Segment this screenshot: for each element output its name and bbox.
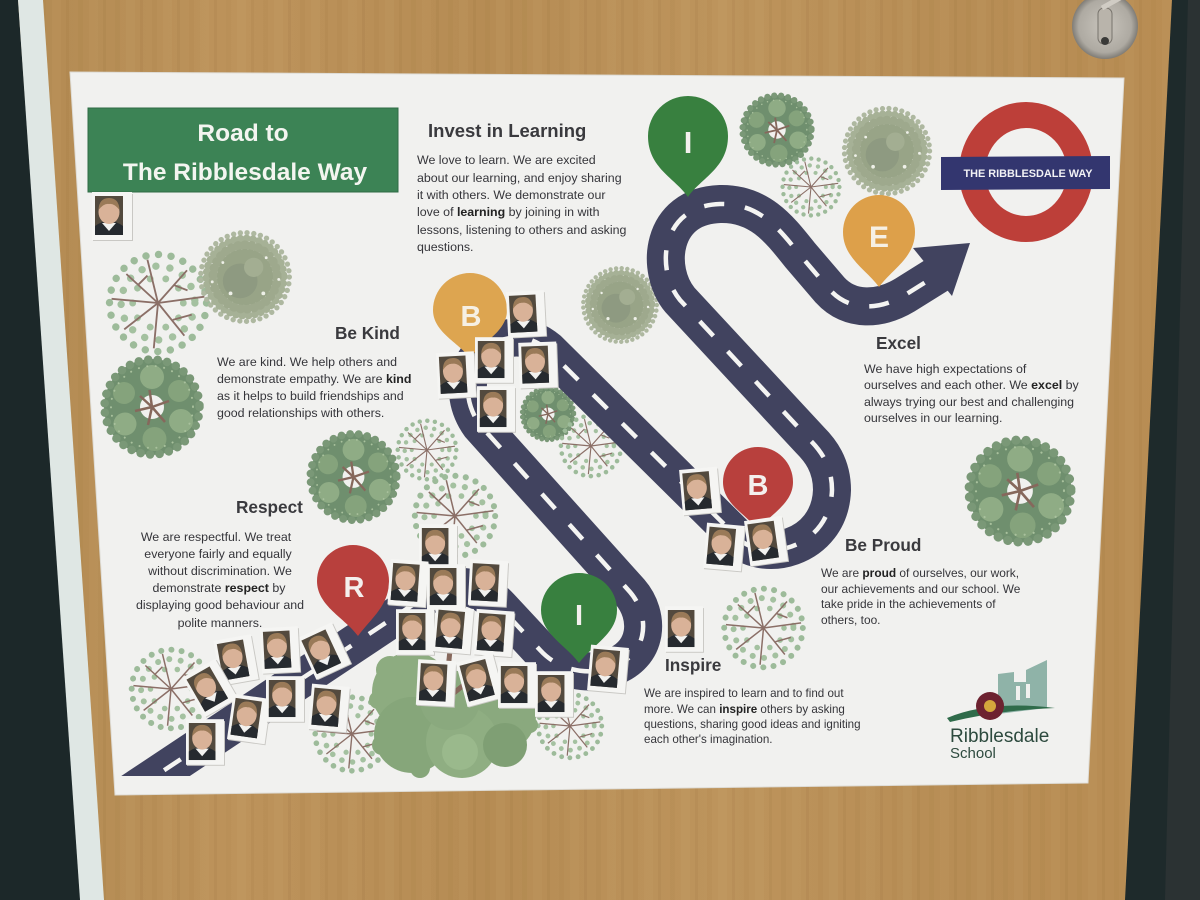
text: Excel: ourselves in our learning. [864,411,1002,425]
pin: I upper: I [684,125,692,160]
pin: I lower: I [575,600,583,632]
text: Excel: always trying our best and challenging [864,395,1074,409]
text: Inspire: questions, sharing good ideas and igniting [644,718,861,731]
logo: Ribblesdale School [947,660,1055,762]
left door frame [0,0,104,900]
text: Respect: demonstrate respect by [153,581,286,595]
pin: B orange: B [461,301,481,333]
text: Respect: everyone fairly and equally [144,547,293,561]
pin: B red [723,447,793,530]
title banner [88,108,398,192]
text: Be Kind: We are kind. We help others and [217,355,397,369]
text: Be Proud [821,566,1021,627]
poster sheet [70,72,1124,795]
text: Be Proud: others, too. [821,613,880,627]
pin: I upper [648,96,728,197]
heading: Invest in Learning: Invest in Learning [428,120,586,141]
title banner: Road to [197,120,289,147]
pin: I lower [541,573,617,663]
big bush [369,650,538,778]
road with arrow [130,204,970,793]
heading: Excel: Excel [876,333,921,353]
text: Invest in Learning: questions. [417,240,473,254]
text: Inspire: We are inspired to learn and to find out [644,687,844,700]
pin: E: E [869,221,889,254]
heading: Be Kind: Be Kind [335,323,400,343]
text: Invest in Learning: lessons, listening to others and asking [417,223,626,237]
text: Excel: We have high expectations of [864,362,1027,376]
student photos [92,192,789,766]
text: Invest in Learning: We love to learn. We are excited [417,153,596,167]
text: Respect: We are respectful. We treat [141,530,292,544]
text: Be Kind: demonstrate empathy. We are kind [217,372,411,386]
trees and foliage [104,95,1071,771]
text: Respect: polite manners. [178,616,262,630]
heading: Respect: Respect [236,497,303,517]
heading: Inspire: Inspire [665,655,721,675]
text: Be Proud: We are proud of ourselves, our work, [821,566,1019,580]
right door frame [1125,0,1200,900]
text: Respect [136,530,304,630]
text: Respect: displaying good behaviour and [136,598,304,612]
pin: B red: B [748,470,768,502]
pin: R [317,545,389,636]
title banner: The Ribblesdale Way [123,159,367,186]
pin: E [843,195,915,287]
icon: door lock with key [1072,0,1138,59]
logo: Ribblesdale School: School [950,745,996,762]
pin: B orange [433,273,507,358]
text: Be Proud: take pride in the achievements of [821,597,996,611]
text: Inspire [644,687,861,746]
roundel: The Ribblesdale Way: THE RIBBLESDALE WAY [963,168,1093,180]
text: Invest in Learning: it with others. We demonstrate our [417,188,605,202]
text: Invest in Learning: about our learning, and enjoy sharing [417,171,622,185]
text: Be Kind: good relationships with others. [217,406,384,420]
text: Excel: ourselves and each other. We excel by [864,378,1080,392]
text: Be Proud: our achievements and our school. We [821,582,1021,596]
text: Inspire: more. We can inspire others by asking [644,703,845,716]
text: Be Kind: as it helps to build friendships and [217,389,404,403]
text: Inspire: each other's imagination. [644,733,773,746]
text: Excel [864,362,1080,425]
roundel: The Ribblesdale Way [941,115,1110,229]
text: Invest in Learning [417,153,626,254]
text: Invest in Learning: love of learning by joining in with [417,205,600,219]
heading: Be Proud: Be Proud [845,535,921,555]
text: Be Kind [217,355,411,420]
logo: Ribblesdale School: Ribblesdale [950,726,1049,747]
text: Respect: without discrimination. We [147,564,292,578]
pin: R: R [344,572,365,604]
